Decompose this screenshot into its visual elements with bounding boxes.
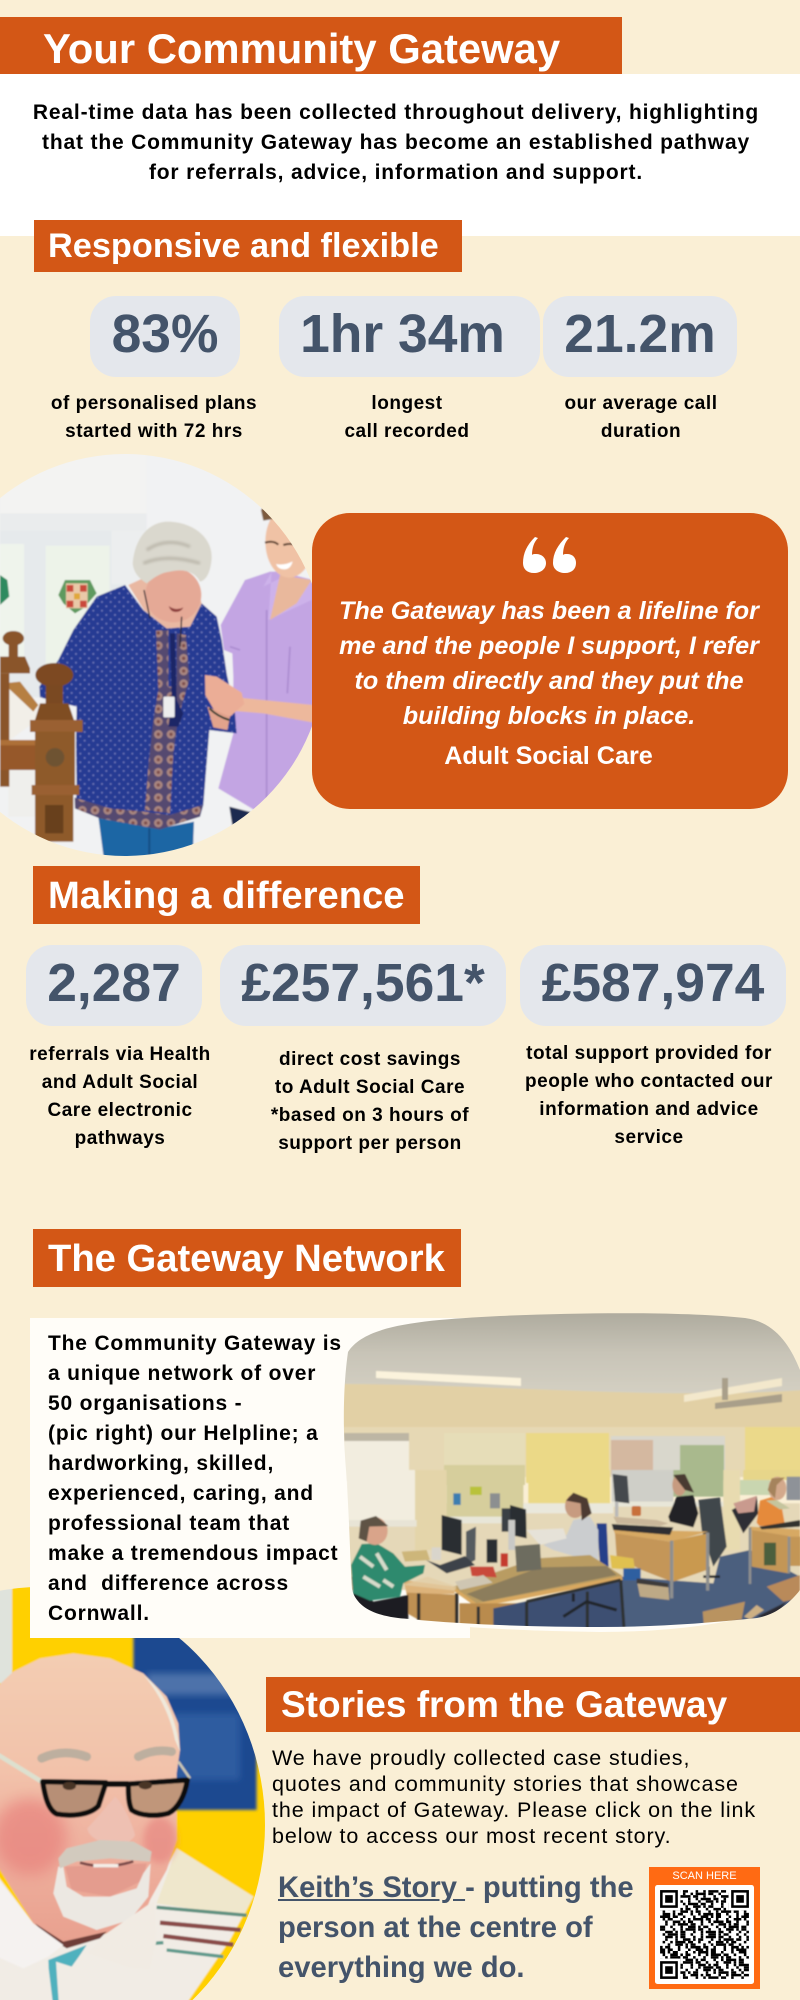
- icon: quotation mark: [523, 537, 576, 573]
- jigsaw desk: [453, 1555, 623, 1607]
- panel: intro white band: [0, 74, 800, 236]
- person: right woman chair: [732, 1496, 758, 1533]
- text: stories intro: We have proudly collected case studies,: [272, 1746, 690, 1770]
- quote text: The Gateway has been a lifeline for: [339, 597, 759, 625]
- back desk monitor: [613, 1474, 629, 1503]
- intro text: for referrals, advice, information and support.: [149, 161, 643, 184]
- intro text: [33, 101, 759, 184]
- jeans: [98, 817, 194, 860]
- label: personalised plans: started with 72 hrs: [65, 421, 243, 442]
- person: left woman: [352, 1577, 408, 1619]
- label: referrals: pathways: [75, 1128, 165, 1149]
- label: cost savings: support per person: [278, 1133, 462, 1154]
- front newel post: [30, 663, 83, 842]
- eyebrows: [42, 1751, 172, 1758]
- label: personalised plans: [51, 393, 257, 442]
- intro text: Real-time data has been collected throughout delivery, highlighting: [33, 101, 759, 124]
- pale blind: [444, 1433, 525, 1465]
- text: stories intro: quotes and community stories that showcase: [272, 1772, 739, 1796]
- label: average call: [564, 393, 718, 442]
- blouse hem: [75, 798, 203, 829]
- heading: making a difference: Making a difference: [48, 874, 405, 917]
- heading: making a difference: [33, 866, 420, 924]
- label: total support: [525, 1043, 773, 1148]
- window frame: [0, 531, 127, 697]
- label: personalised plans: of personalised plans: [51, 393, 257, 414]
- desk clutter: [402, 1550, 430, 1562]
- shirt stripes: [153, 1907, 247, 1957]
- nose: [87, 1797, 135, 1844]
- person: middle woman: [543, 1517, 598, 1563]
- handrail: [0, 740, 36, 770]
- label: referrals: [29, 1044, 211, 1149]
- text: Keith's story link: everything we do.: [278, 1952, 525, 1984]
- label: cost savings: direct cost savings: [279, 1049, 461, 1070]
- stat: 1hr 34m: [279, 296, 540, 377]
- jigsaw desk front and legs: [459, 1603, 526, 1627]
- QR caption: SCAN HERE: [672, 1870, 737, 1882]
- carpet: [500, 1550, 800, 1630]
- text: Keith's story link: [278, 1872, 634, 1984]
- back desk: [613, 1529, 708, 1542]
- shirt: [0, 1848, 253, 2000]
- label: total support: service: [614, 1127, 684, 1148]
- right desk: [749, 1527, 800, 1538]
- teal placket: [48, 1945, 87, 2000]
- stat: 83%: [90, 296, 240, 377]
- stat: £587,974: [520, 945, 786, 1026]
- blue chair: [597, 1523, 609, 1567]
- upper wall: [344, 1384, 800, 1428]
- head: [0, 1653, 180, 1945]
- yellow blind: [526, 1433, 609, 1483]
- person: back woman chair: [698, 1497, 727, 1567]
- callout: quote: [312, 513, 788, 809]
- label: referrals: referrals via Health: [29, 1044, 211, 1065]
- window left top: [344, 1433, 409, 1442]
- strip lights: [376, 1371, 521, 1386]
- office chair legs: [563, 1593, 617, 1617]
- face: [145, 568, 201, 622]
- patterned placket: [145, 630, 189, 813]
- windows: [347, 1470, 415, 1520]
- quote text: me and the people I support, I refer: [339, 632, 759, 660]
- moustache: [58, 1840, 152, 1868]
- text: Keith's story link: person at the centre of: [278, 1912, 593, 1944]
- blue panel: [130, 1638, 259, 1812]
- stat: £257,561*: £257,561*: [241, 954, 485, 1013]
- text: network description: The Community Gateway is a unique network of over 50 organisations - (pic right) our Helpline; a hardworking, skilled, experienced, caring, and professional team that make a tremendous impact and difference across Cornwall.: [48, 1332, 342, 1625]
- stained glass crest: [58, 580, 97, 613]
- stat: £257,561*: [220, 945, 506, 1026]
- puzzle box: [515, 1544, 541, 1572]
- heading: stories from the gateway: [266, 1677, 800, 1732]
- photo: carer and elderly woman on stairs: [0, 454, 312, 856]
- joined hands: [205, 675, 244, 717]
- person: right woman: [757, 1497, 785, 1526]
- title: [0, 17, 622, 74]
- quote text: to them directly and they put the: [354, 667, 744, 695]
- stat: 83%: 83%: [112, 305, 218, 364]
- ceiling soffit: [0, 447, 147, 513]
- photo: helpline office team: [344, 1313, 800, 1632]
- far right blind: [745, 1427, 800, 1480]
- shirt collars: [0, 1883, 64, 1968]
- neck and chest: [128, 577, 202, 628]
- text: stories intro: [272, 1746, 756, 1848]
- white box and red bag: [470, 1567, 497, 1577]
- label: average call: our average call: [564, 393, 718, 414]
- window panes: [0, 544, 24, 661]
- text: Keith's story link: Keith’s Story - putting the: [278, 1872, 634, 1904]
- nurse arm: [236, 698, 312, 723]
- stat: £587,974: £587,974: [542, 954, 764, 1013]
- label: referrals: Care electronic: [47, 1100, 193, 1121]
- stair balusters and rail: [10, 691, 37, 738]
- label: total support: people who contacted our: [525, 1071, 773, 1092]
- label: cost savings: to Adult Social Care: [275, 1077, 465, 1098]
- chin: [65, 1863, 147, 1897]
- back wall: [340, 1503, 800, 1590]
- right window top: [611, 1436, 725, 1476]
- collar shadow: [35, 1923, 107, 1948]
- QR code: [655, 1885, 754, 1984]
- cheeks: [0, 1798, 67, 1875]
- intro text: that the Community Gateway has become an established pathway: [42, 131, 750, 154]
- beard: [53, 1863, 151, 1930]
- foreground boxes: [703, 1602, 745, 1627]
- heading: responsive and flexible: Responsive and flexible: [48, 227, 439, 265]
- monitors on desks: [502, 1508, 511, 1532]
- nurse trousers: [228, 806, 250, 825]
- blouse: [39, 585, 237, 829]
- left desk: [403, 1580, 455, 1594]
- label: longest call: [344, 393, 470, 442]
- hair: [133, 522, 212, 583]
- glasses: [0, 1755, 42, 1782]
- stat: 2,287: 2,287: [47, 954, 181, 1013]
- heading: the gateway network: The Gateway Network: [48, 1237, 445, 1280]
- heading: responsive and flexible: [34, 220, 462, 272]
- person: back woman: [668, 1495, 698, 1527]
- back newel post: [0, 631, 30, 787]
- text: stories intro: below to access our most recent story.: [272, 1824, 671, 1848]
- heading: the gateway network: [33, 1229, 461, 1287]
- label: referrals: and Adult Social: [42, 1072, 198, 1093]
- label: total support: information and advice: [539, 1099, 759, 1120]
- stat: 21.2m: [543, 296, 737, 377]
- label: average call: duration: [601, 421, 681, 442]
- quote text: [339, 597, 760, 730]
- bags and boxes: [610, 1555, 635, 1570]
- heading: stories from the gateway: Stories from the Gateway: [281, 1684, 727, 1725]
- panel: gateway network text: [30, 1318, 470, 1638]
- label: total support: total support provided for: [526, 1043, 772, 1064]
- text: stories intro: the impact of Gateway. Please click on the link: [272, 1798, 756, 1822]
- stat: 1hr 34m: 1hr 34m: [300, 305, 505, 364]
- label: cost savings: *based on 3 hours of: [271, 1105, 469, 1126]
- nurse tunic: [218, 572, 313, 818]
- stat: 21.2m: 21.2m: [564, 305, 716, 364]
- pendant and tassel: [144, 590, 182, 647]
- title: Your Community Gateway: [43, 25, 560, 72]
- quote attribution: Adult Social Care: [444, 742, 653, 770]
- nurse neck and face: [270, 575, 312, 620]
- stat: 2,287: [26, 945, 202, 1026]
- label: longest call: longest: [371, 393, 443, 414]
- label: longest call: call recorded: [344, 421, 470, 442]
- photo: Keith portrait: [0, 1587, 265, 2000]
- QR code panel: [649, 1867, 760, 1989]
- label: cost savings: [271, 1049, 469, 1154]
- quote text: building blocks in place.: [403, 702, 695, 730]
